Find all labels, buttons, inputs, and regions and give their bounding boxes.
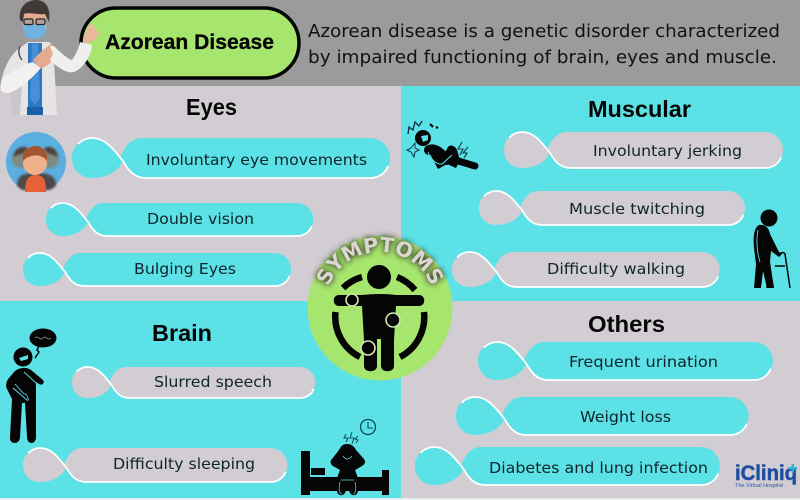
heading: Eyes: Eyes	[186, 94, 237, 120]
pill: Muscle twitching	[479, 191, 745, 225]
pill: Involuntary eye movements: Involuntary eye movements	[146, 151, 367, 169]
pill: Weight loss: Weight loss	[580, 408, 671, 426]
pill: Difficulty walking: Difficulty walking	[547, 260, 685, 278]
pill: Slurred speech	[72, 367, 315, 398]
heading: Muscular: Muscular	[588, 96, 691, 122]
title pill: Azorean Disease	[105, 31, 274, 54]
icon: body with pain points	[334, 265, 424, 371]
pill: Double vision: Double vision	[147, 210, 254, 228]
pill: Involuntary eye movements	[72, 138, 390, 178]
pill: Frequent urination	[478, 342, 773, 380]
pill: Double vision	[46, 203, 313, 236]
panel: eyes background	[0, 86, 401, 301]
icon: child with blurred vision	[6, 132, 66, 192]
pill: Involuntary jerking	[504, 132, 783, 168]
pill: Diabetes and lung infection: Diabetes and lung infection	[489, 459, 708, 477]
icon: man with walker	[754, 210, 790, 288]
title pill	[81, 8, 299, 78]
pill: Bulging Eyes	[23, 253, 291, 286]
intro text: Azorean disease is a genetic disorder characterized	[308, 21, 780, 42]
panel: others background	[401, 301, 800, 498]
panel: muscular background	[401, 86, 800, 301]
curved label: SYMPTOMS: SYMPTOMS	[317, 236, 444, 285]
icon: doctor	[1, 0, 99, 115]
central symptoms badge	[308, 232, 452, 380]
panel: brain background	[0, 301, 401, 498]
pill: Difficulty sleeping: Difficulty sleeping	[113, 455, 255, 473]
heading: Others: Others	[588, 311, 665, 337]
heading: Brain: Brain	[152, 320, 212, 346]
pill: Diabetes and lung infection	[415, 447, 720, 485]
icon: sleepless person on bed	[301, 420, 389, 495]
logo: iCliniq: iCliniq	[735, 462, 797, 485]
pill: Involuntary jerking: Involuntary jerking	[593, 142, 742, 160]
logo: iCliniq: The Virtual Hospital	[735, 483, 783, 489]
intro text	[308, 21, 780, 68]
pill: Bulging Eyes: Bulging Eyes	[134, 260, 236, 278]
pill: Frequent urination: Frequent urination	[569, 353, 718, 371]
pill: Difficulty walking	[452, 252, 720, 287]
header band	[0, 0, 800, 86]
intro text: by impaired functioning of brain, eyes and muscle.	[308, 47, 777, 68]
pill: Slurred speech: Slurred speech	[154, 373, 272, 391]
icon: man with muscle spasm	[407, 121, 475, 169]
pill: Difficulty sleeping	[23, 448, 287, 482]
icon: man with slurred speech	[6, 328, 56, 443]
pill: Muscle twitching: Muscle twitching	[569, 200, 705, 218]
pill: Weight loss	[456, 397, 749, 435]
central symptoms badge: SYMPTOMS	[312, 232, 448, 289]
